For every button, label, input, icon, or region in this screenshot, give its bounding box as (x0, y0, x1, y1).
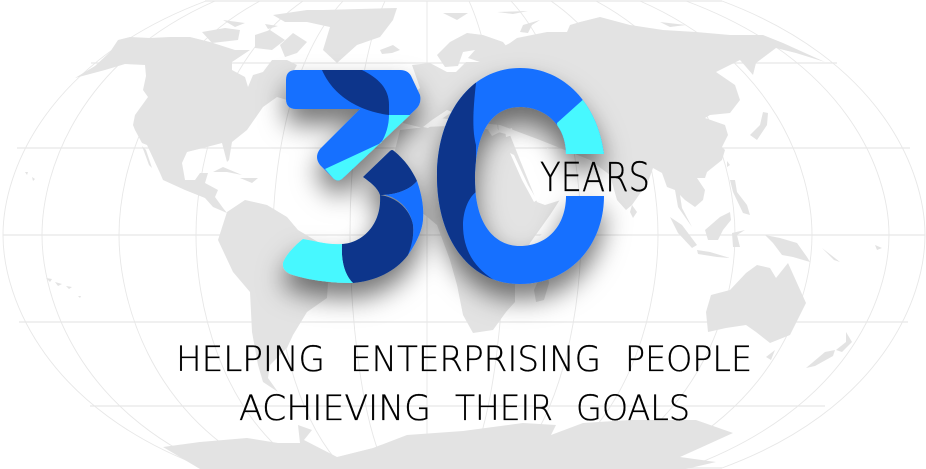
digit 0 dark fold (437, 82, 494, 280)
tagline line 2: THEIR (455, 389, 553, 429)
digit 3 (283, 70, 423, 283)
Australia (706, 263, 806, 343)
tagline (176, 340, 752, 429)
Sri Lanka and Taiwan (630, 161, 730, 218)
Baja California (142, 146, 152, 168)
tagline line 1 (176, 340, 752, 380)
Antarctica (163, 420, 733, 469)
North and Central America (75, 37, 297, 213)
digit 3 upper bowl (363, 150, 417, 195)
inland seas (423, 110, 566, 248)
digit 0 blue ring (437, 68, 604, 284)
tagline line 1: ENTERPRISING (350, 340, 601, 380)
digit 3 dark fold (322, 70, 389, 115)
Indonesia and Philippines (670, 180, 810, 262)
label: YEARS: YEARS (540, 155, 650, 201)
tagline line 1: PEOPLE (625, 340, 752, 380)
digit 3 blue side (380, 181, 423, 255)
digit 3 lower bowl (342, 195, 413, 283)
Svalbard and Russian Arctic islands (443, 11, 686, 33)
Japan (750, 112, 768, 140)
Eurasia (403, 17, 825, 227)
digit 3 cyan tail (283, 239, 353, 283)
Caribbean islands (213, 167, 258, 183)
New Zealand (806, 332, 852, 368)
digit 3 upper stroke (286, 70, 420, 180)
Tasmania (766, 350, 775, 360)
tagline line 2: ACHIEVING (239, 389, 431, 429)
digit 0 cyan segment (557, 100, 604, 154)
tagline line 2: GOALS (576, 389, 690, 429)
big numeral 30 (283, 65, 612, 290)
Africa (390, 125, 563, 333)
Madagascar (534, 270, 549, 302)
Greenland (273, 8, 397, 63)
Arctic islands (202, 20, 400, 57)
small Pacific islands (25, 172, 882, 298)
digit 0 (430, 65, 612, 290)
South America (218, 200, 345, 392)
digit 3 cyan fold (325, 115, 410, 180)
tagline line 2 (239, 389, 690, 429)
tagline line 1: HELPING (176, 340, 325, 380)
